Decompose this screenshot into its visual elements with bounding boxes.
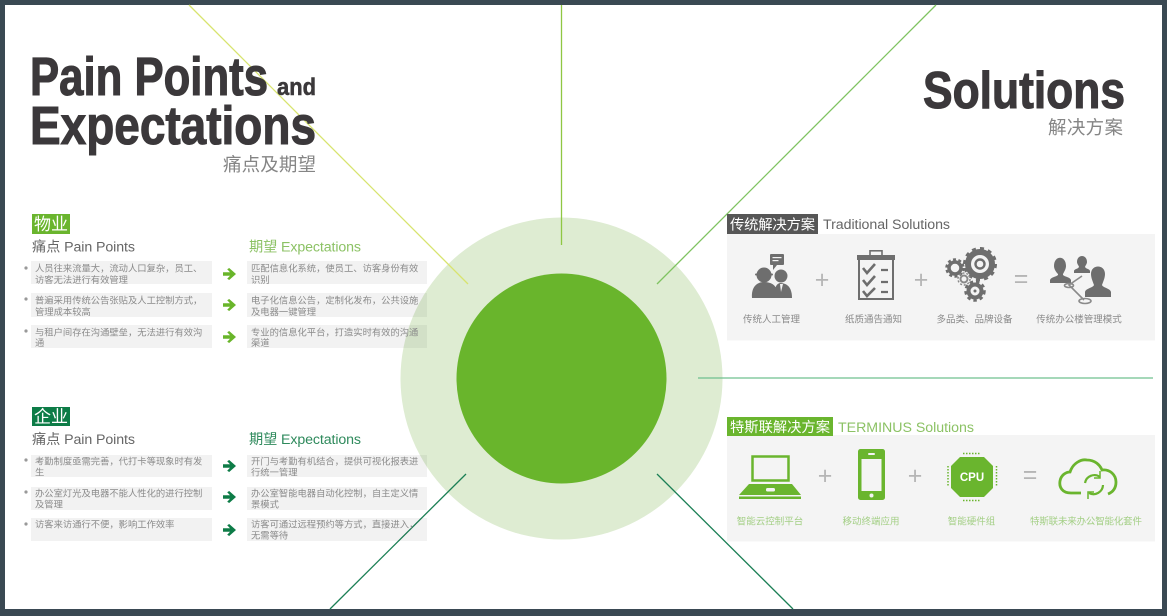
icon: office management people xyxy=(1050,256,1111,304)
row 1: 生 xyxy=(35,466,44,478)
operator: plus: + xyxy=(908,462,922,490)
row 1: 访客无法进行有效管理 xyxy=(35,274,128,285)
row 1: 行统一管理 xyxy=(251,466,298,478)
panel: terminus solutions xyxy=(727,417,1155,542)
panel: enterprise xyxy=(24,407,427,541)
heading: pain points: 痛点 Pain Points xyxy=(32,431,135,448)
heading: pain points: 痛点 Pain Points xyxy=(32,238,135,256)
operator: plus: + xyxy=(815,266,829,294)
row 3 xyxy=(24,518,427,541)
row 1: 开门与考勤有机结合，提供可视化报表进 xyxy=(251,456,418,466)
row 2: 管理成本较高 xyxy=(35,306,91,317)
label: multiple brands of equipment: 多品类、品牌设备 xyxy=(936,314,1013,326)
row 2: 及电器一键管理 xyxy=(251,306,316,317)
row 3: 访客可通过远程预约等方式，直接进入， xyxy=(251,518,418,530)
row 2: 及管理 xyxy=(35,498,63,510)
title: Pain Points and Expectations xyxy=(30,47,316,156)
subtitle: solutions in Chinese: 解决方案 xyxy=(1048,117,1123,138)
icon: laptop xyxy=(739,456,801,499)
tag: property: 物业 xyxy=(34,215,68,234)
row 3: 访客来访通行不便，影响工作效率 xyxy=(35,518,174,530)
heading: expectations: 期望 Expectations xyxy=(249,240,361,256)
heading: terminus solutions: TERMINUS Solutions xyxy=(838,420,974,436)
row 3: 通 xyxy=(35,338,44,348)
row 2: 普遍采用传统公告张贴及人工控制方式， xyxy=(35,294,202,306)
row 1: 考勤制度亟需完善，代打卡等现象时有发 xyxy=(35,456,202,466)
operator: equals: = xyxy=(1023,461,1037,489)
subtitle: pain points in Chinese: 痛点及期望 xyxy=(223,154,316,175)
row 3: 无需等待 xyxy=(251,530,288,540)
label: traditional manual management: 传统人工管理 xyxy=(743,314,800,326)
row 2: 电子化信息公告，定制化发布，公共设施 xyxy=(251,294,418,306)
row 3 xyxy=(24,325,427,348)
label: terminus smart office suite: 特斯联未来办公智能化套件 xyxy=(1030,516,1142,528)
icon: smartphone xyxy=(858,449,885,500)
row 3: 与租户间存在沟通壁垒，无法进行有效沟 xyxy=(35,326,202,338)
operator: plus: + xyxy=(818,462,832,490)
tag: terminus solutions: 特斯联解决方案 xyxy=(730,418,830,436)
panel background xyxy=(727,435,1155,542)
icon: CPU chip xyxy=(948,454,996,500)
tag: enterprise: 企业 xyxy=(34,408,68,426)
operator: equals: = xyxy=(1014,265,1028,293)
label: traditional office management model: 传统办公楼管理模式 xyxy=(1036,314,1122,326)
operator: plus: + xyxy=(914,266,928,294)
row 3: 专业的信息化平台，打造实时有效的沟通 xyxy=(251,326,418,338)
row 1: 人员往来流量大，流动人口复杂，员工、 xyxy=(35,262,202,274)
row 1: 识别 xyxy=(251,275,270,285)
row 1 xyxy=(24,455,427,478)
heading: traditional solutions: Traditional Solutions xyxy=(823,217,950,233)
icon: cloud with sync xyxy=(1060,460,1116,499)
label: paper notices: 纸质通告通知 xyxy=(845,314,902,326)
title: Solutions: Solutions xyxy=(923,62,1125,120)
row 2: 办公室灯光及电器不能人性化的进行控制 xyxy=(35,488,202,498)
label: smart cloud control platform: 智能云控制平台 xyxy=(737,516,803,528)
icon: gears xyxy=(946,248,996,300)
row 1 xyxy=(24,261,427,285)
panel: property xyxy=(24,214,427,348)
icon: workers with speech bubble xyxy=(752,254,792,298)
tag: traditional solutions: 传统解决方案 xyxy=(730,216,815,234)
title: Pain Points and Expectations: Pain Points xyxy=(30,47,268,107)
heading: expectations: 期望 Expectations xyxy=(249,432,361,448)
row 3: 渠道 xyxy=(251,337,270,348)
row 1: 匹配信息化系统，使员工、访客身份有效 xyxy=(251,262,418,274)
row 2 xyxy=(24,293,427,317)
row 2 xyxy=(24,487,427,510)
row 2: 办公室智能电器自动化控制，自主定义情 xyxy=(251,488,418,498)
label: mobile terminal app: 移动终端应用 xyxy=(842,516,900,528)
label: smart hardware set: 智能硬件组 xyxy=(948,516,996,528)
central circle xyxy=(400,218,722,540)
icon: checklist clipboard xyxy=(857,251,895,299)
panel background xyxy=(727,234,1155,340)
row 2: 景模式 xyxy=(251,498,279,510)
panel: traditional solutions xyxy=(727,214,1155,340)
icon: CPU chip: CPU xyxy=(960,472,984,484)
title: Pain Points and Expectations: and xyxy=(277,74,316,101)
title: Pain Points and Expectations: Expectations xyxy=(30,96,316,156)
